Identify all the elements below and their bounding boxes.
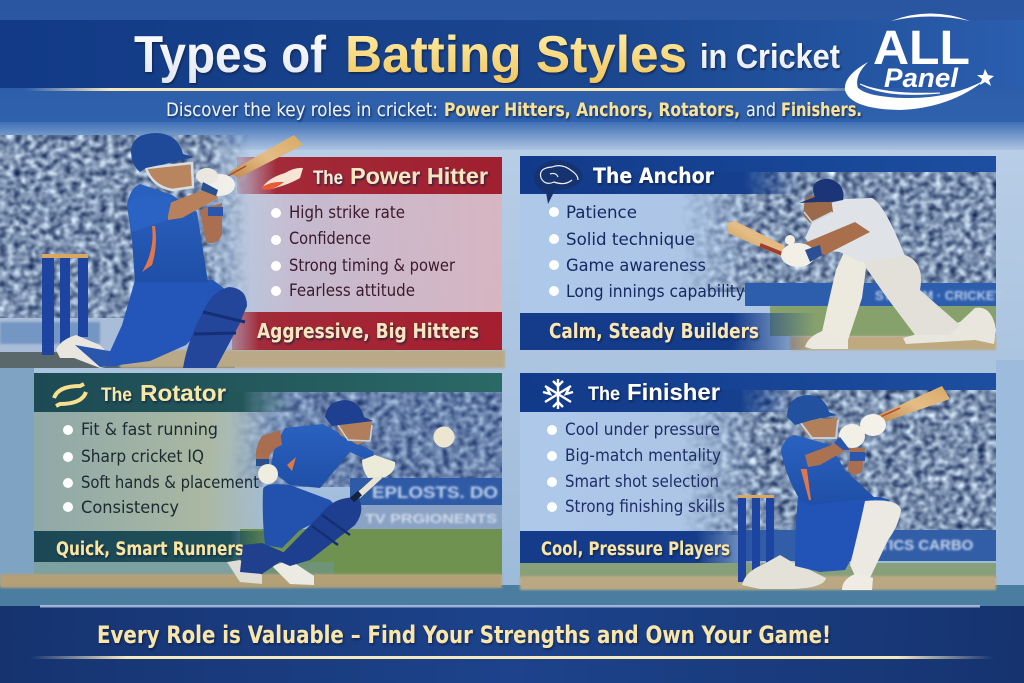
bullet list: Long innings capability — [566, 282, 745, 301]
panel: the anchor: STADIUM · CRICKET — [875, 288, 1003, 303]
bullet list: Fearless attitude — [289, 281, 415, 300]
panel: the rotator — [0, 373, 502, 588]
advertising board — [350, 478, 502, 505]
panel: the finisher — [520, 373, 996, 590]
bullet list: Soft hands & placement — [81, 473, 259, 492]
heading: The Anchor — [593, 164, 715, 188]
heading: The — [588, 384, 620, 405]
footer text: Quick, Smart Runners — [56, 539, 244, 560]
heading: Rotator — [140, 380, 226, 406]
panel: the rotator: TV PRGIONENTS — [365, 511, 497, 526]
title: in Cricket — [700, 38, 840, 76]
heading — [101, 380, 226, 406]
icon: flame streak — [262, 168, 303, 190]
title: Types of — [134, 26, 327, 84]
title — [134, 26, 840, 84]
subtitle: and — [746, 99, 776, 121]
panel: the power hitter — [0, 133, 505, 368]
bullet list — [63, 420, 259, 517]
pitch — [0, 574, 502, 588]
bullet list: Fit & fast running — [81, 420, 218, 439]
player: anchor — [727, 179, 996, 349]
player: rotator — [227, 400, 395, 585]
bullet list: Patience — [566, 203, 637, 222]
stumps — [42, 254, 88, 355]
bullet list: Game awareness — [566, 256, 706, 275]
footer text: Cool, Pressure Players — [541, 539, 730, 560]
advertising board — [745, 530, 996, 561]
grass — [520, 563, 996, 578]
stadium crowd left — [0, 135, 250, 325]
header bar — [237, 157, 502, 194]
icon: thought cloud — [534, 160, 582, 204]
bullet list — [547, 420, 725, 516]
panel: the rotator: EPLOSTS. DO — [372, 483, 498, 502]
subtitle: Finishers. — [781, 99, 862, 121]
heading: The — [313, 168, 343, 189]
stadium crowd — [680, 390, 996, 535]
heading — [588, 379, 720, 405]
bullet list: Solid technique — [566, 230, 695, 249]
advertising board — [745, 283, 996, 306]
header bar — [520, 156, 996, 194]
footer text: Calm, Steady Builders — [549, 319, 759, 343]
subtitle: Power Hitters, Anchors, Rotators, — [444, 99, 740, 121]
footer bar — [520, 531, 765, 563]
bullet list — [549, 203, 745, 301]
logo: All Panel: Panel — [884, 63, 958, 93]
ball — [434, 426, 454, 448]
header bar — [520, 373, 996, 412]
grass — [240, 529, 502, 575]
closing message: Every Role is Valuable – Find Your Strengths and Own Your Game! — [97, 621, 831, 649]
stadium crowd — [680, 172, 996, 292]
icon: snowflake — [543, 379, 573, 409]
footer banner — [0, 605, 1024, 683]
bullet list: Cool under pressure — [565, 420, 720, 439]
footer bar — [34, 531, 279, 562]
header bar — [34, 373, 502, 412]
heading: Power Hitter — [350, 163, 488, 189]
bullet list: Strong timing & power — [289, 256, 455, 275]
title: Batting Styles — [345, 26, 687, 84]
bullet list: Big-match mentality — [565, 446, 721, 465]
footer text: Aggressive, Big Hitters — [257, 319, 479, 343]
bullet list — [271, 203, 455, 300]
player: power hitter — [56, 133, 303, 368]
icon: rotate arrows — [54, 384, 86, 406]
heading: The — [101, 385, 132, 406]
bullet list: Smart shot selection — [565, 472, 719, 491]
subtitle — [166, 99, 862, 121]
logo: All Panel — [845, 14, 994, 110]
player: finisher — [742, 386, 950, 590]
logo: All Panel: ALL — [873, 22, 970, 75]
bullet list: Confidence — [289, 229, 371, 248]
header band — [0, 20, 1024, 91]
bullet list: High strike rate — [289, 203, 405, 222]
heading: Finisher — [627, 379, 720, 405]
panel: the finisher: TICS CARBO — [880, 537, 974, 554]
stadium crowd — [230, 392, 502, 487]
footer bar — [520, 313, 815, 350]
bullet list: Strong finishing skills — [565, 497, 725, 516]
panel: the anchor — [520, 156, 1003, 350]
footer bar — [232, 312, 502, 350]
stumps — [738, 495, 774, 582]
bullet list: Consistency — [81, 498, 179, 517]
bullet list: Sharp cricket IQ — [81, 447, 204, 466]
subtitle: Discover the key roles in cricket: — [166, 99, 438, 121]
pitch — [520, 576, 996, 590]
